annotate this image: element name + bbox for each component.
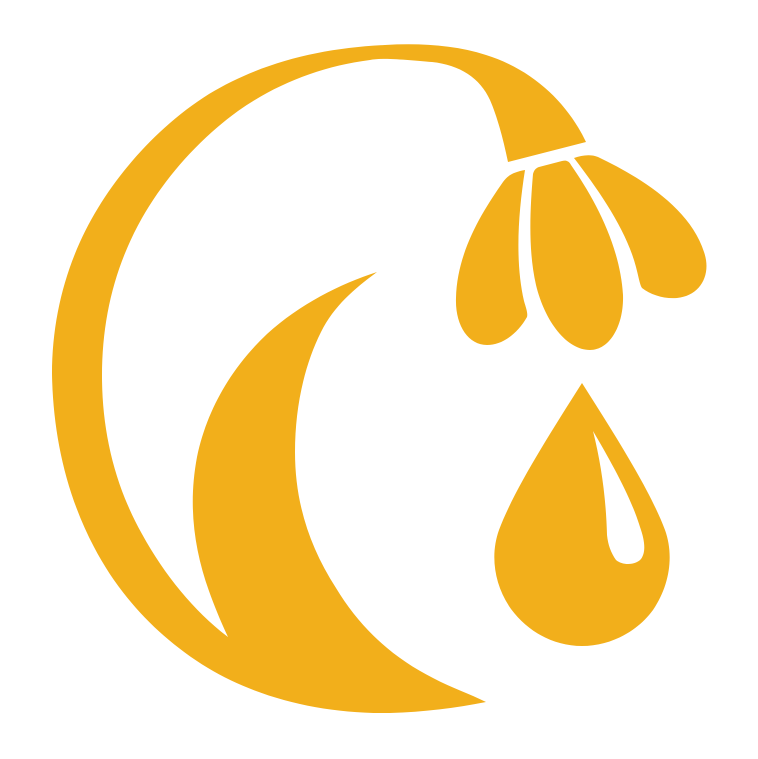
icon: curved stem and leaf xyxy=(52,44,586,713)
icon: water drop xyxy=(494,383,670,646)
icon: left petal xyxy=(456,170,527,345)
icon: right petal xyxy=(574,155,706,298)
icon: middle petal xyxy=(530,161,623,350)
